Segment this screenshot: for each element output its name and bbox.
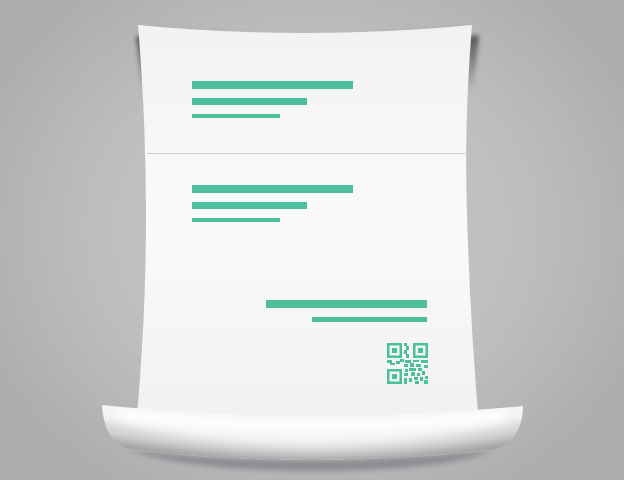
middle section text lines	[192, 185, 353, 222]
paper sheet	[136, 25, 479, 425]
divider	[147, 153, 467, 154]
paper curl	[102, 405, 523, 460]
icon: QR code	[387, 343, 428, 384]
curl shadow	[128, 449, 492, 471]
sheet shadow	[136, 27, 479, 92]
right aligned total lines	[266, 300, 427, 322]
top section text lines	[192, 81, 353, 118]
